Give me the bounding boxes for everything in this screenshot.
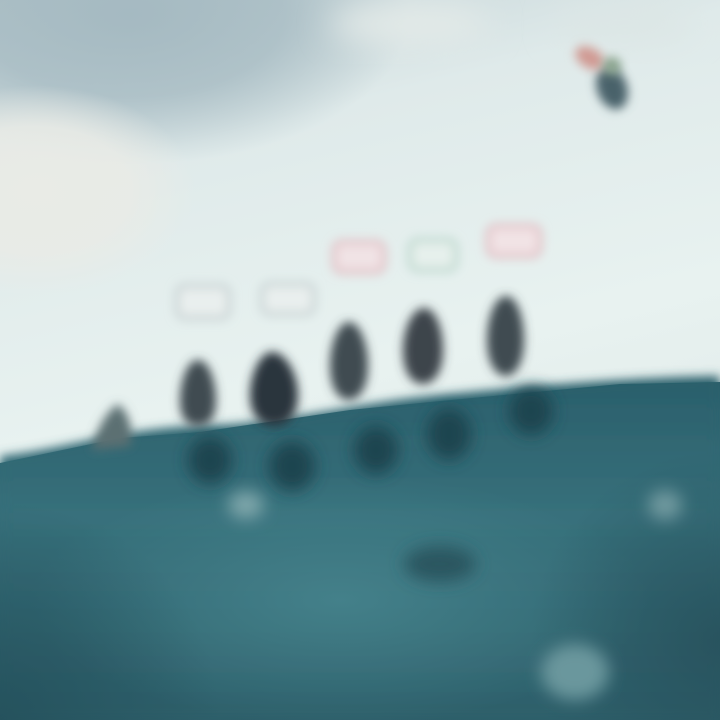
reflection 6 bbox=[509, 387, 553, 435]
underwater details bbox=[228, 490, 682, 700]
penguin 4 bbox=[330, 322, 368, 400]
reflection 3 bbox=[269, 441, 315, 491]
sign 3 bbox=[334, 242, 384, 272]
penguin 3 bbox=[250, 352, 298, 426]
bubble left bbox=[228, 491, 264, 519]
sign 2 bbox=[262, 284, 314, 314]
sign 5 bbox=[488, 226, 540, 256]
penguin reflections bbox=[188, 387, 553, 491]
reflection 4 bbox=[354, 426, 398, 474]
penguin row bbox=[92, 296, 524, 450]
penguin 1 bbox=[92, 404, 131, 450]
bubble bottom bbox=[541, 644, 609, 700]
fish shadow bbox=[404, 546, 476, 582]
reflection 2 bbox=[188, 436, 232, 484]
penguin 5 bbox=[403, 308, 443, 384]
penguin 6 bbox=[487, 296, 524, 376]
sign 1 bbox=[177, 286, 229, 318]
signs above penguins bbox=[177, 226, 540, 318]
sign 4 bbox=[410, 240, 456, 270]
penguin 2 bbox=[180, 360, 216, 426]
reflection 5 bbox=[427, 408, 471, 460]
bubble right bbox=[648, 490, 682, 520]
icon: flying bird bbox=[571, 41, 634, 114]
